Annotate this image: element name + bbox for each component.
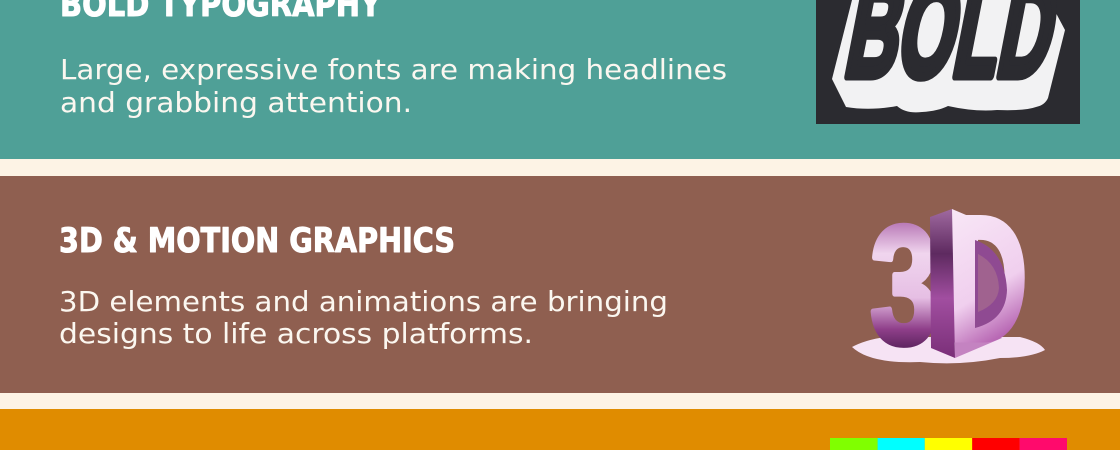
panel: vibrant colors [0, 409, 1120, 450]
text: 3D and motion graphics description: 3D elements and animations are bringing [59, 285, 668, 318]
heading: 3D and motion graphics: 3D & MOTION GRAPHICS [59, 221, 455, 261]
icon: bold lettering [816, 0, 1080, 124]
panel: 3D and motion graphics [0, 176, 1120, 393]
text: bold typography description: and grabbing attention. [60, 86, 412, 119]
panel: bold typography [0, 0, 1120, 159]
icon: colour swatches [830, 438, 1067, 450]
text: bold typography description: Large, expressive fonts are making headlines [60, 53, 727, 86]
icon: 3D lettering: D [944, 179, 1028, 378]
icon: 3D lettering: 3 [870, 191, 938, 379]
icon: 3D lettering [852, 179, 1045, 379]
text: bold typography description [60, 53, 727, 119]
text: 3D and motion graphics description: designs to life across platforms. [59, 317, 533, 350]
text: 3D and motion graphics description [59, 285, 668, 350]
